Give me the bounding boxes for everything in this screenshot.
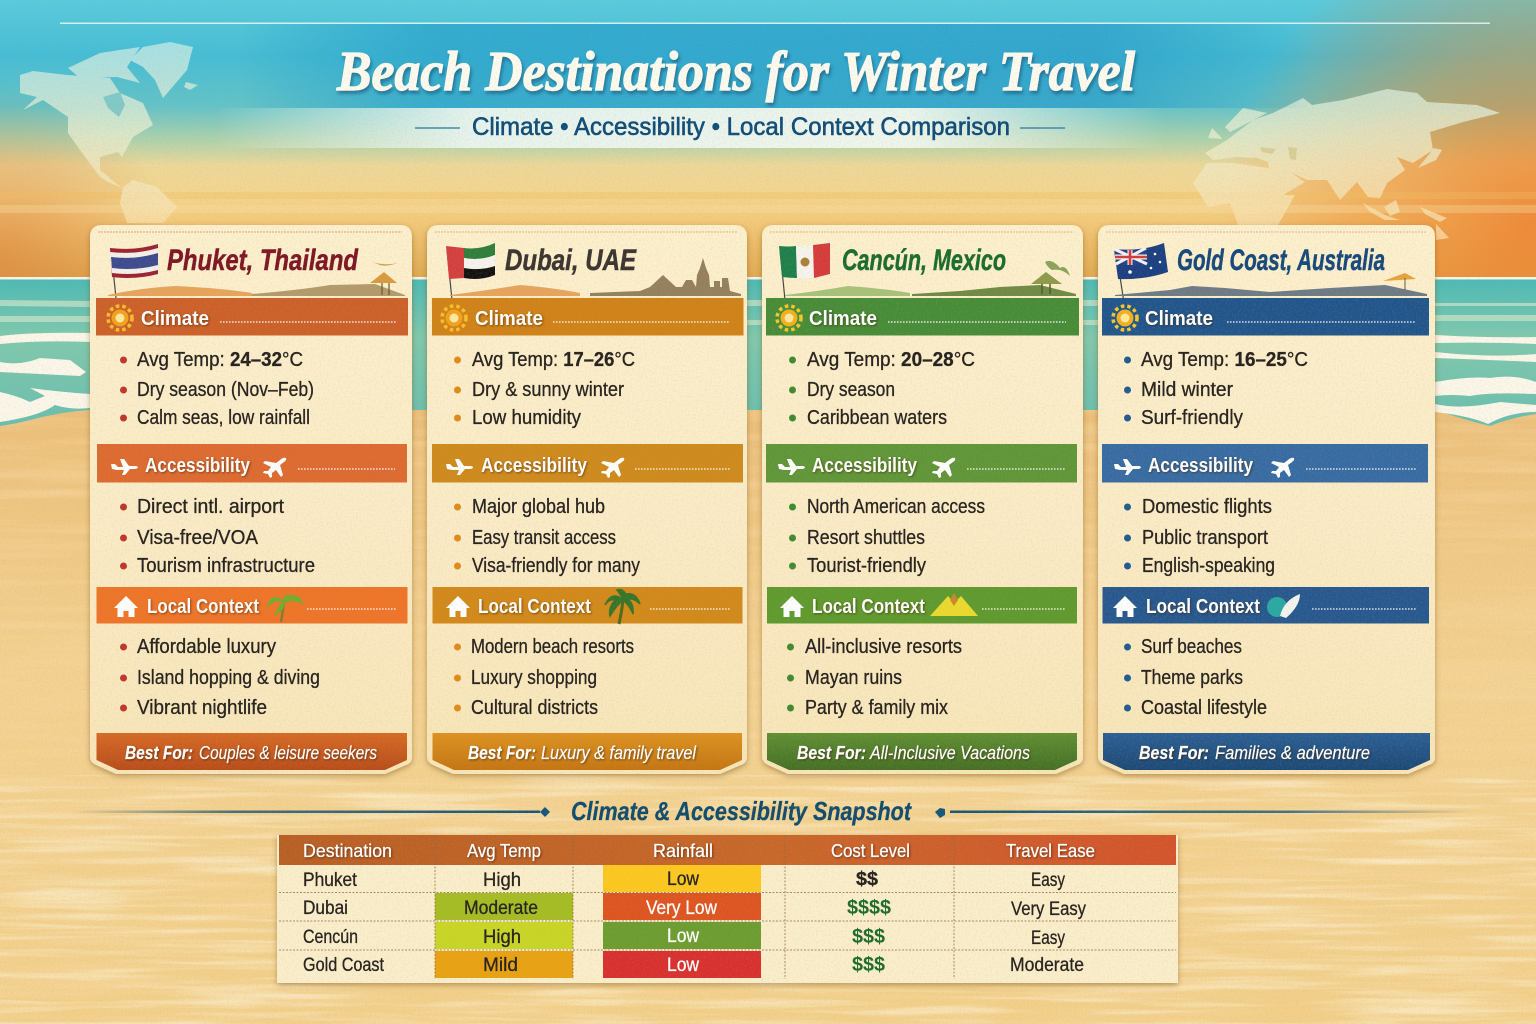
background: sky and sunset: [0, 0, 1536, 280]
row: Gold Coast: $$$: [852, 954, 885, 976]
accessibility list: Resort shuttles: [807, 527, 925, 549]
local context list: Modern beach resorts: [471, 636, 634, 658]
accessibility list: Direct intl. airport: [137, 496, 284, 518]
label: Local Context: [478, 596, 591, 618]
best for ribbon: Couples & leisure seekers: [199, 743, 377, 763]
icon: plane: [778, 459, 805, 475]
accessibility list: English-speaking: [1142, 555, 1275, 577]
icon: house: [780, 596, 804, 617]
section: Climate: [766, 298, 1079, 336]
best for ribbon: [767, 733, 1077, 770]
title: Beach Destinations for Winter Travel: [336, 41, 1135, 103]
accessibility list: [454, 496, 640, 577]
comparison table: [277, 835, 1178, 983]
row: Gold Coast: Mild: [483, 955, 518, 976]
label: Climate: [809, 308, 877, 330]
icon: palm: [268, 596, 302, 622]
climate list: [1124, 349, 1308, 429]
background: sea and waves: [0, 277, 1536, 426]
climate list: Dry season (Nov–Feb): [137, 379, 314, 401]
accessibility list: [789, 496, 985, 577]
panel: Gold Coast, Australia: [1098, 225, 1435, 774]
landscape silhouette: [785, 261, 1076, 296]
climate list: Avg Temp: 20–28°C: [807, 349, 975, 371]
row: Dubai: Moderate: [464, 898, 538, 919]
section: Accessibility: [432, 444, 743, 482]
climate list: [454, 349, 635, 429]
row: Phuket: Phuket: [303, 870, 358, 891]
local context list: [454, 636, 634, 719]
best for ribbon: Best For:: [797, 743, 866, 763]
local context list: Surf beaches: [1141, 636, 1242, 658]
section: Local Context: [96, 587, 408, 624]
section: Local Context: [767, 587, 1077, 624]
row: Phuket: Easy: [1031, 870, 1065, 891]
table header: Cost Level: [831, 841, 910, 861]
panel: Dubai, UAE: [427, 225, 747, 774]
section: Climate: [1102, 298, 1429, 336]
heading: Gold Coast, Australia: [1177, 244, 1385, 277]
local context list: [787, 636, 962, 719]
local context list: Mayan ruins: [805, 667, 902, 689]
row: Phuket: $$: [856, 869, 878, 890]
climate list: Avg Temp: 24–32°C: [137, 349, 303, 371]
snapshot heading with rules: [70, 796, 1470, 826]
icon: plane: [932, 458, 955, 478]
accessibility list: Tourist-friendly: [807, 555, 926, 577]
subtitle: Climate • Accessibility • Local Context Comparison: [472, 113, 1010, 141]
world map: Americas: [20, 42, 198, 223]
local context list: Vibrant nightlife: [137, 697, 267, 719]
climate list: [120, 349, 314, 429]
local context list: All-inclusive resorts: [805, 636, 962, 658]
table header: Destination: [303, 841, 392, 861]
accessibility list: [120, 496, 315, 577]
row: Cancún: High: [483, 927, 521, 948]
section: Local Context: [1102, 587, 1429, 624]
accessibility list: Visa-friendly for many: [472, 555, 640, 577]
row: Dubai: Dubai: [303, 898, 348, 919]
label: Accessibility: [481, 455, 588, 477]
background: sand: [0, 405, 1536, 1024]
icon: sun: [1113, 306, 1137, 330]
table header: Rainfall: [653, 841, 713, 861]
climate list: Caribbean waters: [807, 407, 947, 429]
row: Gold Coast: Moderate: [1010, 955, 1084, 976]
heat cells: [435, 865, 761, 978]
label: Accessibility: [812, 455, 918, 477]
heading: Cancún, Mexico: [842, 244, 1006, 277]
local context list: Affordable luxury: [137, 636, 276, 658]
icon: sun: [777, 306, 801, 330]
climate list: Dry season: [807, 379, 895, 401]
local context list: Theme parks: [1141, 667, 1243, 689]
icon: house: [1113, 596, 1137, 617]
table header: [279, 835, 1176, 865]
flag: Mexico: [779, 243, 830, 300]
best for ribbon: Best For:: [468, 743, 536, 763]
icon: plane: [446, 459, 473, 475]
world map: Eurasia, Africa and Oceania: [1193, 89, 1500, 240]
icon: plane: [111, 459, 138, 475]
best for ribbon: [432, 733, 742, 770]
local context list: Party & family mix: [805, 697, 948, 719]
row: Phuket: Low: [667, 869, 699, 890]
label: Climate: [141, 308, 209, 330]
icon: plane: [601, 458, 624, 478]
row: Cancún: Cencún: [303, 927, 358, 948]
climate list: Surf-friendly: [1141, 407, 1243, 429]
icon: plane: [1271, 458, 1294, 478]
best for ribbon: Best For:: [125, 743, 193, 763]
icon: palm: [605, 590, 640, 624]
world map: Hudson Bay: [103, 92, 125, 117]
row: Dubai: Very Low: [646, 898, 717, 919]
section: Climate: [96, 298, 408, 336]
row: Cancún: Low: [667, 926, 699, 947]
local context list: Island hopping & diving: [137, 667, 320, 689]
flag: Australia: [1114, 243, 1168, 303]
section: Accessibility: [766, 444, 1077, 482]
climate list: Avg Temp: 16–25°C: [1141, 349, 1308, 371]
icon: house: [114, 596, 138, 617]
flag: Thailand: [110, 244, 158, 298]
subtitle banner: [215, 108, 1165, 148]
panel: Phuket, Thailand: [90, 225, 412, 774]
heading: Dubai, UAE: [505, 244, 637, 277]
accessibility list: Domestic flights: [1142, 496, 1272, 518]
climate list: [789, 349, 975, 429]
section: Accessibility: [97, 444, 407, 482]
panel: Cancún, Mexico: [762, 225, 1083, 774]
local context list: Luxury shopping: [471, 667, 597, 689]
table header: Avg Temp: [467, 841, 541, 861]
landscape silhouette: [108, 262, 405, 296]
landscape silhouette: [450, 258, 741, 296]
label: Accessibility: [145, 455, 251, 477]
heading: Phuket, Thailand: [167, 244, 359, 277]
table header: Travel Ease: [1006, 841, 1095, 861]
climate list: Calm seas, low rainfall: [137, 407, 310, 429]
landscape silhouette: [1115, 273, 1427, 296]
label: Local Context: [1146, 596, 1260, 618]
accessibility list: [1124, 496, 1275, 577]
row: Gold Coast: Low: [667, 955, 699, 976]
best for ribbon: [96, 733, 407, 770]
row: Cancún: Easy: [1031, 928, 1065, 949]
row: Cancún: $$$: [852, 926, 885, 948]
local context list: Cultural districts: [471, 697, 598, 719]
section: Climate: [432, 298, 744, 336]
snapshot heading with rules: Climate & Accessibility Snapshot: [571, 796, 912, 826]
accessibility list: Easy transit access: [472, 527, 616, 549]
best for ribbon: Best For:: [1139, 743, 1209, 763]
climate list: Low humidity: [472, 407, 581, 429]
label: Climate: [1145, 308, 1213, 330]
accessibility list: Tourism infrastructure: [137, 555, 315, 577]
row: Gold Coast: Gold Coast: [303, 955, 385, 976]
climate list: Dry & sunny winter: [472, 379, 624, 401]
icon: surfboard and wave: [1267, 594, 1300, 618]
row: Phuket: [303, 869, 1065, 891]
local context list: [120, 636, 320, 719]
row: Gold Coast: [303, 954, 1084, 976]
accessibility list: North American access: [807, 496, 985, 518]
world map: inland seas: [1260, 147, 1297, 160]
accessibility list: Visa-free/VOA: [137, 527, 259, 549]
label: Accessibility: [1148, 455, 1254, 477]
best for ribbon: [1103, 733, 1430, 770]
icon: pyramid: [930, 593, 978, 616]
row: Dubai: Very Easy: [1011, 899, 1086, 920]
best for ribbon: Luxury & family travel: [541, 743, 697, 763]
accessibility list: Major global hub: [472, 496, 605, 518]
local context list: Coastal lifestyle: [1141, 697, 1267, 719]
section: Local Context: [432, 587, 742, 624]
climate list: Mild winter: [1141, 379, 1233, 401]
best for ribbon: Families & adventure: [1215, 743, 1370, 763]
label: Local Context: [147, 596, 259, 618]
accessibility list: Public transport: [1142, 527, 1268, 549]
icon: plane: [1114, 459, 1141, 475]
row: Cancún: [303, 926, 1065, 949]
row: Dubai: [303, 897, 1086, 920]
best for ribbon: All-Inclusive Vacations: [869, 743, 1030, 763]
row: Phuket: High: [483, 870, 521, 891]
local context list: [1124, 636, 1267, 719]
climate list: Avg Temp: 17–26°C: [472, 349, 635, 371]
label: Local Context: [812, 596, 925, 618]
icon: house: [446, 596, 470, 617]
row: Dubai: $$$$: [847, 897, 891, 919]
icon: plane: [263, 458, 286, 478]
section: Accessibility: [1102, 444, 1428, 482]
flag: UAE: [446, 243, 495, 300]
label: Climate: [475, 308, 543, 330]
icon: sun: [442, 306, 466, 330]
icon: sun: [108, 306, 132, 330]
title banner: [60, 22, 1490, 108]
